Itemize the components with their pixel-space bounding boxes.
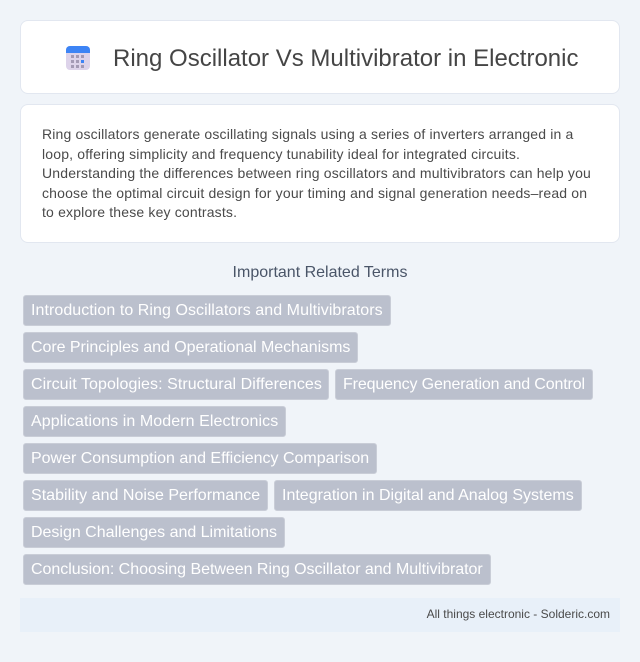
heading: related terms: Important Related Terms: [233, 264, 407, 281]
tag: Introduction to Ring Oscillators and Multivibrators: [31, 302, 383, 319]
tag: Applications in Modern Electronics: [31, 413, 278, 430]
panel: intro paragraph: to explore these key contrasts.: [42, 204, 237, 220]
tag: Integration in Digital and Analog Systems: [282, 487, 574, 504]
panel: intro paragraph: choose the optimal circuit design for your timing and signal generation needs–read on: [42, 185, 587, 201]
panel: intro paragraph: [20, 104, 620, 243]
tag: [23, 295, 391, 326]
panel: intro paragraph: loop, offering simplicity and frequency tunability ideal for integrated circuits.: [42, 146, 520, 162]
tag: Circuit Topologies: Structural Differences: [31, 376, 322, 393]
tag: [23, 332, 358, 363]
tag: [23, 517, 285, 548]
tag: Frequency Generation and Control: [343, 376, 585, 393]
tag: [23, 480, 268, 511]
tag: [335, 369, 593, 400]
tag: Conclusion: Choosing Between Ring Oscillator and Multivibrator: [31, 561, 483, 578]
footer: [20, 598, 620, 632]
panel: intro paragraph: Ring oscillators generate oscillating signals using a series of inverters arranged in a: [42, 126, 574, 142]
tag: Power Consumption and Efficiency Comparison: [31, 450, 369, 467]
tag list: [23, 295, 593, 585]
footer credit: All things electronic - Solderic.com: [427, 607, 610, 621]
tag: [23, 369, 329, 400]
title: Ring Oscillator Vs Multivibrator in Electronic: [113, 45, 578, 72]
header panel: [20, 20, 620, 94]
tag: [23, 406, 286, 437]
tag: [23, 554, 491, 585]
tag: Core Principles and Operational Mechanisms: [31, 339, 350, 356]
panel: intro paragraph: Understanding the differences between ring oscillators and multivibrators can help you: [42, 165, 591, 181]
tag: Design Challenges and Limitations: [31, 524, 277, 541]
tag: [274, 480, 582, 511]
tag: [23, 443, 377, 474]
tag: Stability and Noise Performance: [31, 487, 260, 504]
icon: calendar: [66, 46, 90, 70]
